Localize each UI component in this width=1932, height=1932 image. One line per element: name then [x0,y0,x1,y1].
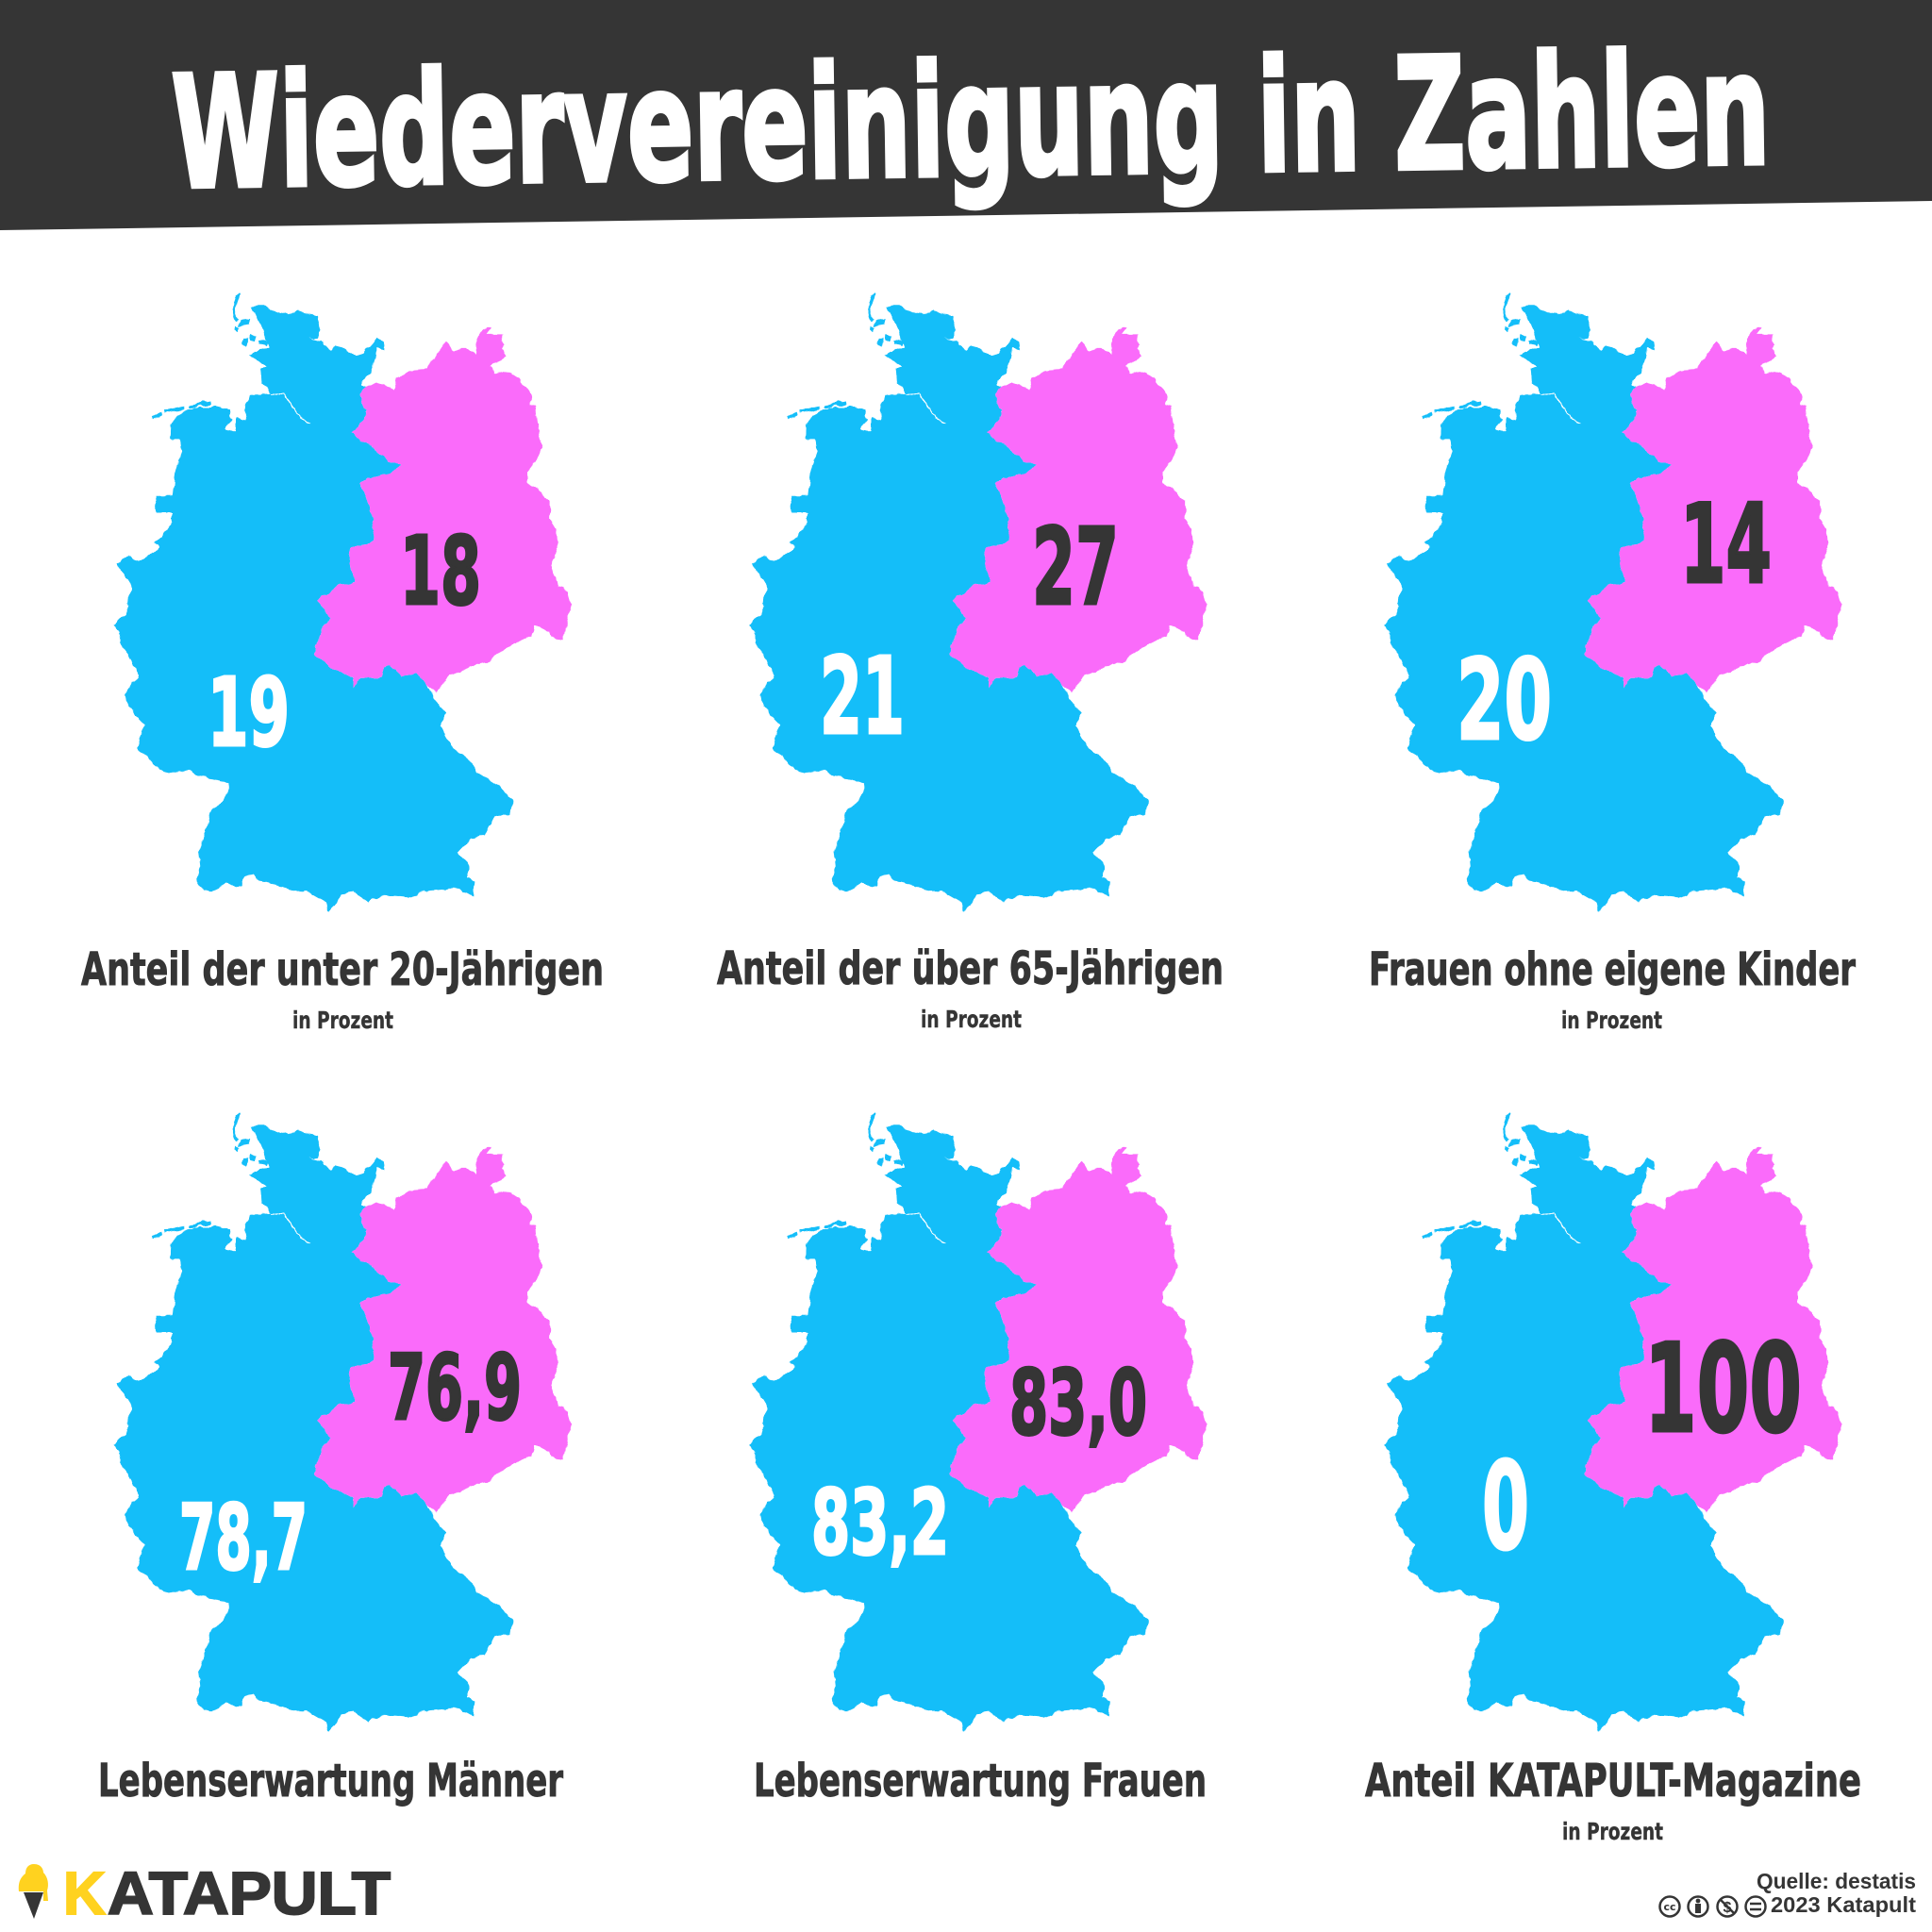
map: Germany east and west [1383,293,1841,911]
map: Germany east and west [113,293,572,911]
value east: 14 [1680,481,1772,608]
source and licence [1660,1869,1916,1917]
licence icons: cc [1663,1901,1676,1913]
heading: Lebenserwartung Männer [98,1755,563,1807]
value east: 76,9 [388,1337,522,1441]
value west: 78,7 [179,1487,308,1591]
panel: Lebenserwartung Frauen [748,1113,1207,1807]
logo: KATAPULT [19,1859,391,1927]
value west: 20 [1457,635,1552,765]
map: Germany east and west [113,1113,572,1731]
heading: Anteil der unter 20-Jährigen [81,943,604,996]
wordmark ATAPULT: ATAPULT [108,1859,391,1927]
licence text: 2023 Katapult [1771,1892,1916,1917]
source text: Quelle: destatis [1757,1869,1916,1893]
value east: 27 [1032,507,1119,629]
panel: Anteil der über 65-Jährigen [717,293,1224,1033]
value east: 100 [1644,1317,1802,1460]
panel: Anteil der unter 20-Jährigen [81,293,604,1034]
panel: Lebenserwartung Männer [98,1113,572,1807]
value west: 83,2 [811,1472,949,1575]
wordmark K: K [63,1859,106,1927]
heading: Anteil der über 65-Jährigen [717,942,1224,995]
licence icons [1660,1896,1766,1917]
value west: 19 [208,658,290,768]
map: Germany east and west [1383,1113,1841,1731]
unit: in Prozent [921,1006,1022,1033]
value east: 83,0 [1009,1352,1147,1456]
heading: Lebenserwartung Frauen [754,1755,1207,1807]
unit: in Prozent [1561,1007,1662,1034]
licence icons: $ [1724,1900,1732,1916]
panel: Anteil KATAPULT-Magazine [1365,1113,1861,1845]
unit: in Prozent [292,1007,393,1034]
map: Germany east and west [748,293,1207,911]
unit: in Prozent [1562,1818,1663,1845]
title band [0,0,1932,230]
panel: Frauen ohne eigene Kinder [1369,293,1856,1034]
map: Germany east and west [748,1113,1207,1731]
icon: ice cream cone [19,1864,48,1919]
value west: 21 [820,636,905,758]
value west: 0 [1482,1437,1529,1577]
value east: 18 [400,516,481,626]
